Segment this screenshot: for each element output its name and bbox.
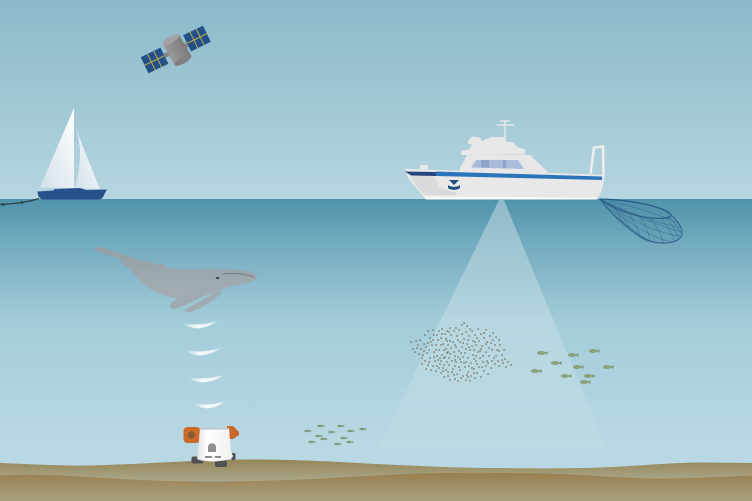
wave 3 (187, 374, 226, 382)
wave 4 (192, 400, 228, 408)
near flipper (170, 283, 210, 309)
superstructure (461, 136, 525, 155)
bow shading (410, 176, 457, 196)
whale body (93, 247, 257, 298)
net mesh (600, 199, 682, 244)
sailboat (0, 108, 107, 206)
seabed lander (184, 426, 239, 467)
lander feet (192, 453, 236, 467)
right solar panel (183, 26, 211, 51)
stern A-frame (590, 146, 604, 175)
wave 2 (184, 347, 223, 355)
satellite body (161, 32, 193, 68)
sky background (0, 0, 752, 200)
lander lid (200, 428, 229, 430)
right orange float (227, 426, 239, 439)
school of fish: small (304, 425, 366, 445)
left solar panel (141, 48, 168, 73)
mooring line (0, 198, 39, 206)
hull logo (448, 180, 460, 190)
seabed (0, 460, 752, 501)
acoustic waves (181, 320, 228, 408)
mouth line (222, 273, 254, 277)
research vessel (405, 120, 605, 200)
net mouth (600, 199, 671, 218)
navy bow stripe (405, 172, 436, 176)
satellite arms (160, 41, 195, 58)
cabin (460, 155, 548, 176)
hull (38, 188, 107, 200)
windows (471, 160, 524, 169)
bow fitting (420, 165, 428, 170)
main sail (40, 108, 74, 188)
hull white waterline (424, 196, 597, 200)
fishing net (600, 199, 682, 244)
left orange float (184, 427, 200, 443)
net outline (600, 199, 682, 243)
lander slots (205, 456, 221, 458)
plankton swarm (411, 323, 511, 381)
jib sail (75, 128, 100, 189)
far flipper (185, 289, 221, 312)
blue stripe (436, 172, 602, 180)
humpback whale (93, 247, 257, 312)
seabed lower layer (0, 473, 752, 501)
school of fish: large (531, 349, 614, 384)
eye (216, 277, 219, 279)
seabed upper layer (0, 460, 752, 501)
wave 1 (181, 320, 220, 328)
sonar beam (372, 200, 612, 462)
hull (405, 168, 605, 200)
ocean water (0, 199, 752, 501)
mast (496, 120, 514, 143)
lander door (208, 443, 216, 452)
satellite (141, 26, 211, 73)
lander body (197, 428, 233, 461)
